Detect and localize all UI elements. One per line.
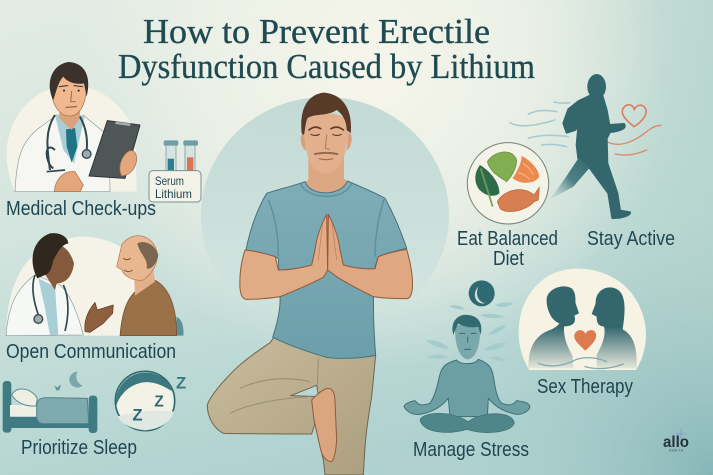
patient body: [120, 280, 177, 336]
label: Serum Lithium: Lithium: [155, 187, 192, 201]
label: Serum Lithium: Serum: [155, 174, 184, 188]
icon: moon and heart: [69, 372, 83, 388]
label: Open Communication: Open Communication: [6, 341, 176, 363]
doctor stethoscope: [33, 275, 68, 331]
neck and face: [59, 100, 80, 130]
salmon: [497, 187, 539, 212]
cream circle: [7, 85, 137, 192]
icon: sleeping circle: Z: [154, 393, 164, 410]
label: Sex Therapy: Sex Therapy: [537, 376, 633, 398]
t-shirt: [246, 181, 407, 358]
icon: heart: [574, 330, 596, 351]
hair: [301, 93, 351, 135]
shirt collar and seams: [268, 183, 384, 257]
label: Prioritize Sleep: Prioritize Sleep: [21, 437, 137, 459]
cream circle: [519, 269, 646, 370]
left arm and hand: [240, 214, 328, 299]
label: Eat Balanced Diet: Diet: [493, 248, 524, 270]
spinach: [475, 165, 499, 196]
title: [118, 12, 535, 86]
icon: balanced diet plate: [467, 143, 549, 224]
panel: sex therapy: [519, 269, 646, 370]
motion lines: [510, 102, 661, 155]
panel: open communication: [6, 233, 183, 336]
icon: moon clock: [469, 280, 495, 306]
trousers: [207, 337, 376, 475]
label: Serum Lithium: [155, 174, 192, 201]
head: [455, 322, 480, 359]
clipboard: [89, 121, 140, 178]
stethoscope: [47, 115, 87, 170]
label: Medical Check-ups: Medical Check-ups: [6, 198, 156, 220]
waves: [538, 358, 623, 369]
right arm and hand: [328, 214, 413, 299]
trouser folds: [230, 358, 318, 413]
doctor coat: [6, 275, 83, 336]
carrot slices: [513, 156, 539, 183]
icon: heart: [622, 105, 646, 127]
icon: sleeping circle: Z: [176, 373, 186, 392]
lettuce: [487, 152, 517, 182]
hair: [50, 62, 88, 100]
icon: serum lithium test tubes: [149, 140, 201, 202]
couple silhouettes: [528, 286, 579, 368]
runner silhouette: [563, 74, 630, 218]
central figure halo: [201, 97, 449, 333]
icon: sleeping circle: [115, 371, 186, 431]
label: Eat Balanced Diet: Eat Balanced: [457, 228, 558, 250]
logo: allo health: HEALTH: [669, 448, 684, 452]
writing hand: [54, 171, 83, 192]
panel: prioritize sleep: [3, 371, 186, 433]
label: Manage Stress: Manage Stress: [413, 439, 529, 461]
chair: [175, 317, 183, 336]
panel: medical check-ups: [7, 62, 140, 192]
neck: [305, 157, 347, 192]
patient neck and head: [134, 268, 155, 296]
doctor head: [42, 244, 74, 290]
stress wisps: [426, 302, 513, 361]
head: [304, 113, 348, 173]
shirt and tie: [55, 115, 85, 163]
icon: sleeping circle: Z: [132, 405, 143, 424]
raised foot: [312, 388, 337, 462]
trailing leg fade: [550, 158, 590, 199]
cream circle: [6, 237, 177, 336]
icon: bed: [3, 381, 97, 433]
panel: manage stress: [404, 280, 530, 433]
crossed legs: [420, 413, 514, 433]
finger lines: [318, 223, 337, 260]
label: Stay Active: Stay Active: [587, 228, 675, 250]
title: How to Prevent Erectile: [143, 12, 490, 51]
ears: [301, 133, 352, 151]
central figure: man in tree pose: [207, 93, 413, 475]
facial features: [309, 127, 343, 160]
logo: allo health: allo: [663, 434, 689, 451]
doctor hand: [85, 302, 113, 332]
eyes and mouth: [59, 86, 82, 107]
person body: [404, 359, 530, 417]
doctor coat: [15, 115, 110, 192]
holding hand: [120, 151, 137, 176]
label: Eat Balanced Diet: [457, 228, 558, 270]
title: Dysfunction Caused by Lithium: [118, 47, 535, 86]
panel: stay active: [510, 74, 661, 218]
